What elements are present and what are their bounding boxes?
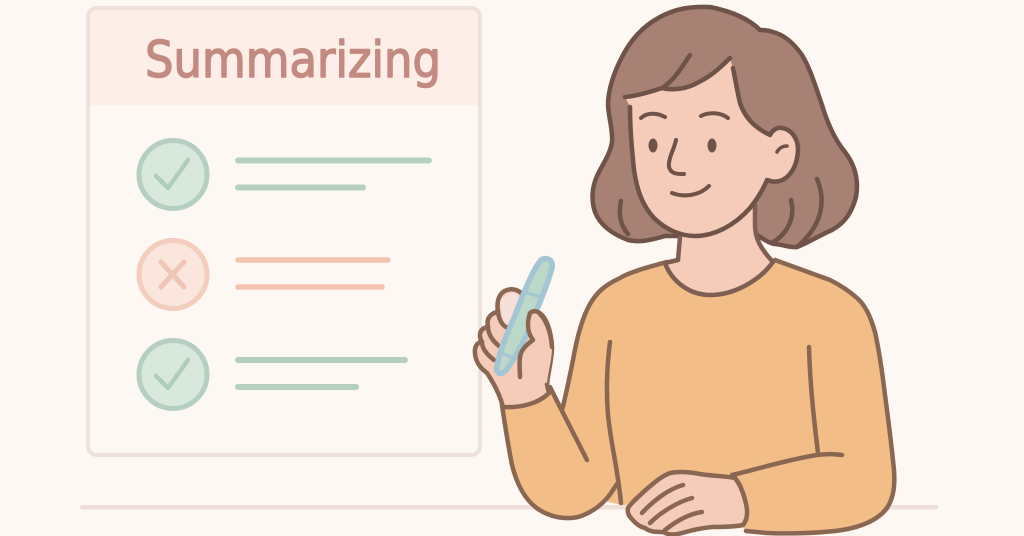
neck and collar outline [665,205,773,295]
face [625,58,798,236]
resting hand [628,472,747,534]
list item 2: cross [139,240,388,308]
pen bands [501,292,538,358]
floor line [80,505,938,510]
figure: woman [475,7,894,534]
sweater torso fill [561,260,894,533]
pale top finger [500,293,524,326]
panel header band [90,10,478,105]
bangs [625,55,730,97]
panel body [88,8,480,455]
left sleeve fill [502,387,620,518]
sweater creases [607,342,842,503]
thumb fill [520,311,552,383]
list item 1: check [139,140,429,208]
list item 3: check [139,340,405,408]
icon: check circle 2 [139,340,207,408]
pen [497,259,552,374]
nose [669,140,684,174]
text placeholder lines 1 [238,160,429,188]
smile [672,186,709,195]
sweater outline [562,260,894,533]
heading: Summarizing [145,31,441,89]
panel: checklist card [88,8,480,455]
neck [665,195,773,295]
eyebrows [641,113,728,118]
left sleeve outline [502,387,617,518]
text placeholder lines 2 [238,260,388,287]
eyes [648,138,716,152]
icon: check circle 1 [139,140,207,208]
thumb [520,311,552,383]
finger lines [482,312,516,360]
face and ear outline [630,68,798,236]
text placeholder lines 3 [238,360,405,387]
palm and fingers [475,289,552,407]
pen body [497,259,552,374]
hair [593,7,857,247]
raised hand [475,289,552,407]
ear detail [777,146,787,152]
resting hand fingers [642,485,702,530]
icon: cross circle [139,240,207,308]
hair strands [620,179,822,247]
thumb outline [520,311,552,377]
